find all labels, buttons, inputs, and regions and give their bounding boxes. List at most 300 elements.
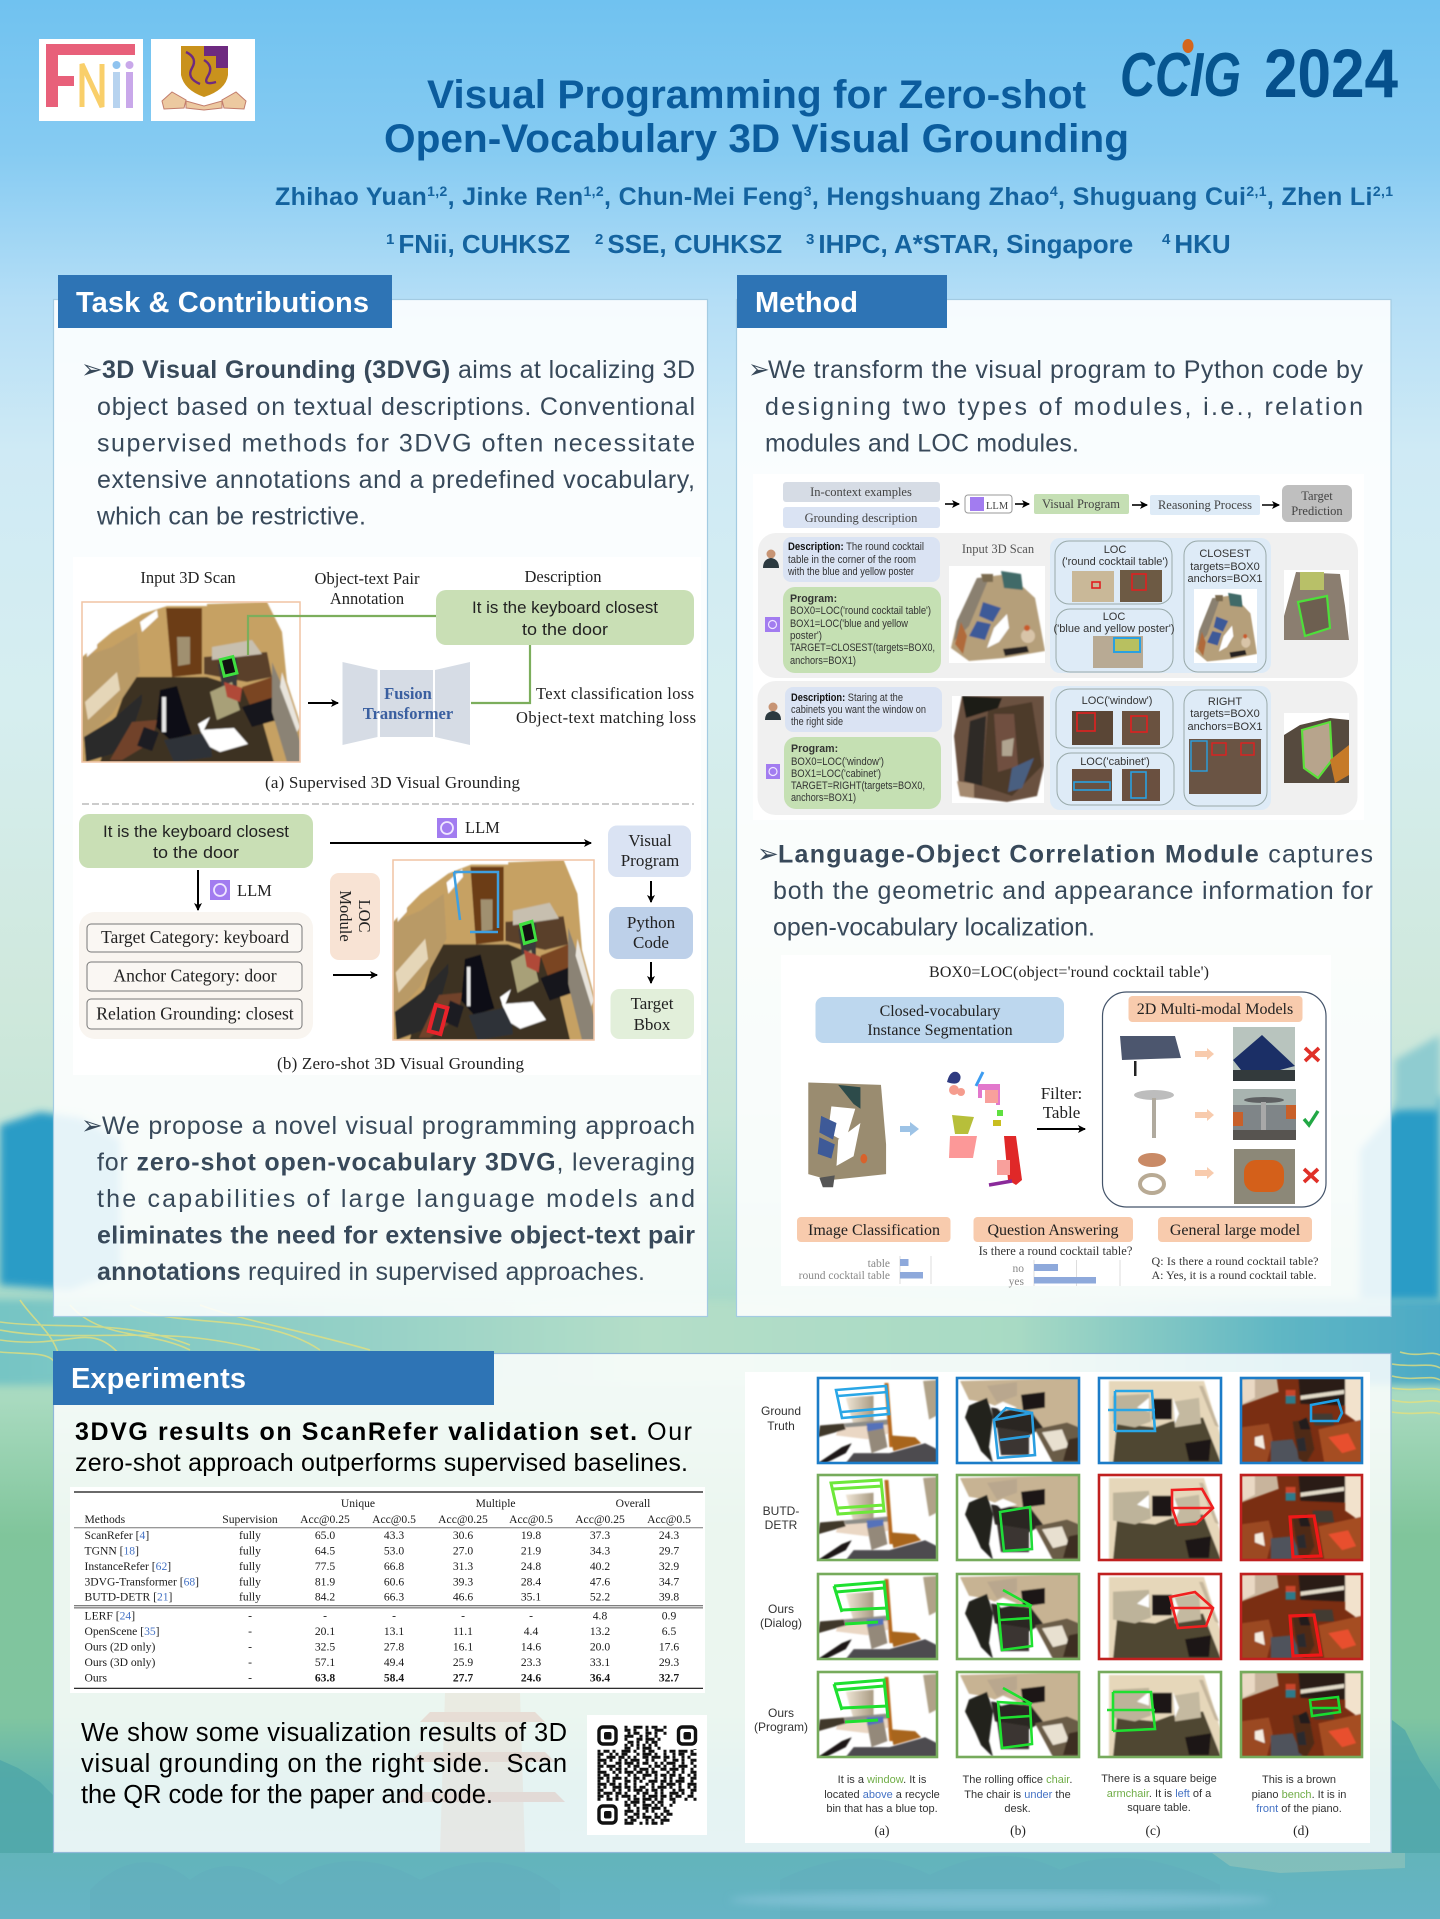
- text block: proposed approach: for zero-shot open-vocabulary 3DVG, leveraging: [97, 1148, 695, 1176]
- example row 1: table in the corner of the room: [788, 554, 916, 566]
- example row 1: [758, 533, 1358, 678]
- question answering: [974, 1217, 1133, 1288]
- figure: LOC module: [781, 955, 1331, 1288]
- pipeline legend: Reasoning Process: [1158, 498, 1252, 512]
- text block: task description: extensive annotations and a predefined vocabulary,: [97, 466, 695, 494]
- results table: 19.8: [521, 1529, 541, 1542]
- decoration: pagoda: [400, 1693, 565, 1852]
- results table: 4.8: [593, 1610, 607, 1623]
- results table: Supervision: [222, 1513, 278, 1526]
- text block: task description: object based on textual descriptions. Conventional: [97, 393, 695, 421]
- results table: -: [248, 1625, 252, 1638]
- results table: TGNN [18]: [84, 1544, 139, 1557]
- caption d: piano bench. It is in: [1252, 1789, 1346, 1801]
- example row 1: anchors=BOX1: [1188, 573, 1262, 585]
- image classification: table: [868, 1258, 890, 1270]
- results table: 52.2: [590, 1591, 610, 1604]
- results table: 60.6: [384, 1575, 404, 1588]
- example row 2: LOC('window'): [1082, 695, 1152, 707]
- row labels: BUTD-: [763, 1504, 799, 1518]
- results table: ScanRefer [4]: [84, 1529, 149, 1542]
- results table: Methods: [84, 1513, 126, 1526]
- example row 1: TARGET=CLOSEST(targets=BOX0,: [790, 642, 935, 654]
- results table: 63.8: [315, 1671, 335, 1684]
- text block: method intro: modules and LOC modules.: [765, 430, 1079, 458]
- categories box: Anchor Category: door: [113, 966, 277, 986]
- results table: Acc@0.25: [438, 1513, 488, 1526]
- panel: task and contributions: [54, 275, 708, 1316]
- figure: LOC module: Table: [1043, 1103, 1080, 1122]
- text block: task description: which can be restrictive.: [96, 502, 366, 530]
- results table: 24.3: [659, 1529, 679, 1542]
- authors: , Jinke Ren: [448, 183, 583, 211]
- QR code: [587, 1715, 707, 1835]
- figure: qualitative results: [745, 1372, 1370, 1843]
- figure part a: supervised: Input 3D Scan: [140, 568, 236, 587]
- results table: 66.3: [384, 1591, 404, 1604]
- example row 1: BOX1=LOC('blue and yellow: [790, 618, 908, 630]
- categories box: Target Category: keyboard: [101, 927, 289, 947]
- results table: 43.3: [384, 1529, 404, 1542]
- caption c: There is a square beige: [1101, 1773, 1217, 1785]
- results table: fully: [239, 1544, 261, 1557]
- text block: task description: ➢: [81, 355, 103, 385]
- 2D multi-modal models box: 2D Multi-modal Models: [1137, 1001, 1293, 1018]
- text block: language-object correlation module: [757, 840, 1373, 942]
- results table: Multiple: [476, 1497, 516, 1510]
- row: ours (dialog): [818, 1574, 1362, 1659]
- icon: LLM: [437, 818, 457, 838]
- question answering: Is there a round cocktail table?: [979, 1244, 1133, 1258]
- header: experiments: Experiments: [71, 1363, 246, 1395]
- example row 1: Description: The round cocktail: [788, 541, 924, 553]
- caption c: square table.: [1127, 1802, 1191, 1814]
- scan with predicted boxes: [393, 860, 594, 1040]
- results table: 31.3: [453, 1560, 473, 1573]
- results table: Acc@0.5: [509, 1513, 553, 1526]
- results table: 27.0: [453, 1544, 473, 1557]
- results table: OpenScene [35]: [84, 1625, 160, 1638]
- pipeline legend: [783, 482, 1352, 528]
- room scan: [808, 1083, 886, 1187]
- results table: 17.6: [659, 1641, 679, 1654]
- pipeline legend: Prediction: [1291, 504, 1343, 518]
- text block: language-object correlation module: open-vocabulary localization.: [773, 914, 1095, 942]
- text block: visualization note: [81, 1719, 567, 1809]
- results table: 16.1: [453, 1641, 473, 1654]
- figure part a: supervised: Annotation: [330, 589, 404, 608]
- results table: 81.9: [315, 1575, 335, 1588]
- row: ground truth: [818, 1378, 1362, 1463]
- caption c: [1101, 1773, 1217, 1838]
- results table: fully: [239, 1575, 261, 1588]
- row labels: (Program): [754, 1720, 808, 1734]
- text block: task description: 3D Visual Grounding (3DVG) aims at localizing 3D: [102, 356, 695, 384]
- authors: 1,2: [427, 183, 447, 199]
- caption b: The rolling office chair.: [963, 1774, 1072, 1786]
- authors: , Shuguang Cui: [1058, 183, 1246, 211]
- results table: 53.0: [384, 1544, 404, 1557]
- example row 1: ('round cocktail table'): [1062, 556, 1168, 568]
- caption a: [824, 1774, 940, 1838]
- results table: LERF [24]: [84, 1610, 135, 1623]
- results table: Ours: [84, 1671, 108, 1684]
- icon: person: [763, 550, 779, 568]
- row labels: Truth: [767, 1419, 795, 1433]
- text block: language-object correlation module: ➢: [757, 840, 779, 870]
- scan image: [82, 602, 300, 762]
- general large model: A: Yes, it is a round cocktail table.: [1152, 1268, 1316, 1282]
- authors: , Chun-Mei Feng: [604, 183, 803, 211]
- results table: -: [529, 1610, 533, 1623]
- affiliations: IHPC, A*STAR, Singapore: [818, 229, 1133, 259]
- text block: visualization note: visual grounding on the right side. Scan: [81, 1750, 567, 1778]
- image classification: [797, 1217, 950, 1284]
- row labels: Ground: [761, 1404, 801, 1418]
- figure: LOC module: Filter:: [1041, 1084, 1082, 1103]
- figure part b: zero-shot: LOC: [355, 900, 374, 932]
- closed-vocabulary box: [816, 997, 1064, 1043]
- closed-vocabulary box: Closed-vocabulary: [880, 1003, 1000, 1020]
- row: BUTD-DETR: [818, 1475, 1362, 1560]
- figure: visual program pipeline: [753, 474, 1364, 820]
- header: experiments: [53, 1351, 494, 1405]
- results table: fully: [239, 1560, 261, 1573]
- icon: person: [765, 702, 781, 720]
- header: method: [737, 275, 947, 328]
- panel: experiments: [53, 1351, 1391, 1852]
- results table: -: [461, 1610, 465, 1623]
- caption a: It is a window. It is: [838, 1774, 927, 1786]
- results table: 40.2: [590, 1560, 610, 1573]
- results table: 24.8: [521, 1560, 541, 1573]
- general large model: General large model: [1170, 1222, 1301, 1239]
- figure part a: supervised: (a) Supervised 3D Visual Grounding: [265, 773, 520, 792]
- results table: -: [248, 1671, 252, 1684]
- affiliations: HKU: [1174, 229, 1231, 259]
- row: ours (program): [818, 1672, 1362, 1757]
- row labels: DETR: [765, 1518, 798, 1532]
- categories box: [79, 912, 313, 1039]
- results table: 11.1: [453, 1625, 473, 1638]
- results table: Acc@0.5: [647, 1513, 691, 1526]
- example row 2: Description: Staring at the: [791, 692, 903, 704]
- text block: proposed approach: ➢: [81, 1111, 103, 1141]
- results table: 84.2: [315, 1591, 335, 1604]
- caption c: (c): [1146, 1823, 1160, 1838]
- general large model: Q: Is there a round cocktail table?: [1152, 1254, 1318, 1268]
- figure part b: zero-shot: Code: [633, 933, 669, 952]
- header: task and contributions: Task & Contributions: [76, 287, 369, 319]
- results table: fully: [239, 1529, 261, 1542]
- affiliations: 4: [1162, 231, 1171, 248]
- logo: CUHK crest: [151, 39, 255, 121]
- results table: 77.5: [315, 1560, 335, 1573]
- text block: method intro: ➢: [748, 355, 770, 385]
- results table: Ours (2D only): [84, 1641, 155, 1654]
- results table: Overall: [616, 1497, 650, 1510]
- closed-vocabulary box: Instance Segmentation: [867, 1022, 1013, 1039]
- title: Visual Programming for Zero-shot: [427, 73, 1086, 117]
- conference logo: CCIG 2024: CCIG: [1120, 41, 1241, 110]
- results table: fully: [239, 1591, 261, 1604]
- results table: Acc@0.25: [300, 1513, 350, 1526]
- example row 2: [758, 681, 1358, 815]
- caption a: (a): [875, 1823, 889, 1838]
- row labels: Ours: [768, 1602, 794, 1616]
- results table: 39.8: [659, 1591, 679, 1604]
- results table: Unique: [341, 1497, 375, 1510]
- example row 2: RIGHT: [1208, 696, 1242, 708]
- affiliations: 1: [386, 231, 394, 248]
- affiliations: 3: [806, 231, 814, 248]
- text block: proposed approach: the capabilities of large language models and: [97, 1185, 695, 1213]
- row labels: Ours: [768, 1706, 794, 1720]
- figure part b: zero-shot: [79, 814, 694, 1073]
- results table: Acc@0.25: [575, 1513, 625, 1526]
- authors: Zhihao Yuan: [275, 183, 427, 211]
- question answering: yes: [1009, 1276, 1025, 1288]
- general large model: [1152, 1217, 1318, 1282]
- results table: 27.8: [384, 1641, 404, 1654]
- caption b: The chair is under the: [964, 1789, 1071, 1801]
- fusion transformer: Fusion: [384, 684, 432, 703]
- pipeline legend: LLM: [986, 501, 1009, 512]
- example row 2: BOX0=LOC('window'): [791, 756, 884, 768]
- segmentation: [947, 1072, 1022, 1185]
- example row 1: CLOSEST: [1199, 548, 1251, 560]
- example row 1: LOC: [1103, 611, 1125, 623]
- authors: , Hengshuang Zhao: [812, 183, 1050, 211]
- results table: 13.2: [590, 1625, 610, 1638]
- panel: method: [736, 275, 1391, 1316]
- example row 2: cabinets you want the window on: [791, 704, 926, 716]
- title: Open-Vocabulary 3D Visual Grounding: [384, 117, 1129, 161]
- text block: results summary: [75, 1418, 692, 1477]
- results table: Acc@0.5: [372, 1513, 416, 1526]
- caption d: [1252, 1774, 1346, 1838]
- authors: , Zhen Li: [1267, 183, 1372, 211]
- title: [384, 73, 1129, 161]
- authors: 3: [804, 183, 812, 199]
- figure part b: zero-shot: LLM: [465, 818, 500, 837]
- results table: 21.9: [521, 1544, 541, 1557]
- results table: 33.1: [590, 1656, 610, 1669]
- image classification: round cocktail table: [799, 1270, 890, 1282]
- text block: results summary: 3DVG results on ScanRefer validation set. Our: [75, 1418, 692, 1446]
- results table: [70, 1487, 705, 1693]
- icon: LLM: [765, 617, 780, 632]
- results table: 24.6: [521, 1671, 541, 1684]
- caption d: (d): [1293, 1823, 1309, 1838]
- results table: BUTD-DETR [21]: [84, 1591, 172, 1604]
- results table: 32.7: [659, 1671, 679, 1684]
- figure part b: zero-shot: (b) Zero-shot 3D Visual Grounding: [277, 1054, 524, 1073]
- text block: task description: [81, 355, 695, 530]
- description box: It is the keyboard closest: [472, 598, 658, 617]
- example row 2: targets=BOX0: [1190, 708, 1260, 720]
- results table: 47.6: [590, 1575, 610, 1588]
- example row 1: targets=BOX0: [1190, 561, 1260, 573]
- categories box: Relation Grounding: closest: [96, 1004, 294, 1024]
- figure part b: zero-shot: Python: [627, 913, 676, 932]
- results table: 13.1: [384, 1625, 404, 1638]
- results table: 32.9: [659, 1560, 679, 1573]
- results table: 3DVG-Transformer [68]: [84, 1575, 199, 1588]
- affiliations: 2: [595, 231, 603, 248]
- results table: 32.5: [315, 1641, 335, 1654]
- figure part b: zero-shot: Program: [621, 851, 679, 870]
- text block: visualization note: the QR code for the paper and code.: [81, 1781, 493, 1809]
- caption a: located above a recycle: [824, 1789, 940, 1801]
- figure part b: zero-shot: to the door: [153, 843, 239, 862]
- icon: LLM: [766, 764, 780, 779]
- results table: 14.6: [521, 1641, 541, 1654]
- results table: 30.6: [453, 1529, 473, 1542]
- results table: 34.3: [590, 1544, 610, 1557]
- figure part a: supervised: [82, 567, 696, 792]
- results table: 27.7: [453, 1671, 473, 1684]
- results table: -: [323, 1610, 327, 1623]
- results table: 34.7: [659, 1575, 679, 1588]
- example row 1: Input 3D Scan: [962, 542, 1035, 556]
- header: task and contributions: [58, 275, 392, 328]
- question answering: no: [1012, 1263, 1024, 1275]
- question answering: Question Answering: [987, 1222, 1119, 1239]
- results table: -: [392, 1610, 396, 1623]
- example row 2: BOX1=LOC('cabinet'): [791, 768, 881, 780]
- example row 2: TARGET=RIGHT(targets=BOX0,: [791, 780, 925, 792]
- results table: -: [248, 1656, 252, 1669]
- example row 2: anchors=BOX1: [1188, 721, 1262, 733]
- text block: proposed approach: [81, 1111, 695, 1286]
- row labels: [754, 1404, 808, 1734]
- example row 2: Program:: [791, 743, 838, 755]
- figure part a: supervised: Text classification loss: [536, 684, 694, 703]
- fusion transformer: Transformer: [363, 704, 453, 723]
- caption d: front of the piano.: [1256, 1803, 1342, 1815]
- fusion transformer: [342, 662, 470, 745]
- example row 1: BOX0=LOC('round cocktail table'): [790, 605, 931, 617]
- results table: 65.0: [315, 1529, 335, 1542]
- results table: -: [248, 1641, 252, 1654]
- image classification: Image Classification: [808, 1222, 940, 1239]
- example row 1: with the blue and yellow poster: [787, 566, 914, 578]
- text block: task description: supervised methods for 3DVG often necessitate: [97, 430, 695, 458]
- figure part b: zero-shot: Module: [336, 890, 355, 942]
- example row 1: anchors=BOX1): [790, 655, 856, 667]
- figure part b: zero-shot: Visual: [628, 831, 672, 850]
- authors: 2,1: [1373, 183, 1393, 199]
- caption a: bin that has a blue top.: [826, 1803, 938, 1815]
- example row 1: LOC: [1104, 544, 1126, 556]
- results table: 29.3: [659, 1656, 679, 1669]
- authors: 1,2: [583, 183, 604, 199]
- results table: 66.8: [384, 1560, 404, 1573]
- text block: language-object correlation module: Language-Object Correlation Module captures: [778, 840, 1373, 868]
- figure part b: zero-shot: Target: [631, 994, 674, 1013]
- pipeline legend: In-context examples: [810, 485, 912, 499]
- results table: 4.4: [524, 1625, 538, 1638]
- results table: 37.3: [590, 1529, 610, 1542]
- text block: visualization note: We show some visualization results of 3D: [81, 1719, 567, 1747]
- caption c: armchair. It is left of a: [1107, 1788, 1212, 1800]
- figure: supervised and zero-shot 3D visual grounding: [73, 557, 701, 1075]
- figure part b: zero-shot: LLM: [237, 881, 272, 900]
- caption b: desk.: [1004, 1803, 1031, 1815]
- conference logo: CCIG 2024: [1120, 35, 1398, 112]
- text block: proposed approach: We propose a novel visual programming approach: [102, 1112, 695, 1140]
- affiliations: [386, 229, 1231, 259]
- results table: 35.1: [521, 1591, 541, 1604]
- header: method: Method: [755, 287, 858, 319]
- text block: method intro: designing two types of modules, i.e., relation: [765, 393, 1363, 421]
- logo: FNii: [39, 39, 143, 121]
- 2D multi-modal models box: [1102, 992, 1326, 1207]
- text block: method intro: [748, 355, 1364, 458]
- authors: 2,1: [1246, 183, 1267, 199]
- results table: 58.4: [384, 1671, 404, 1684]
- pipeline legend: Visual Program: [1042, 497, 1120, 511]
- caption d: This is a brown: [1262, 1774, 1336, 1786]
- icon: LLM: [210, 880, 230, 900]
- results table: 39.3: [453, 1575, 473, 1588]
- affiliations: SSE, CUHKSZ: [607, 229, 782, 259]
- pipeline legend: Grounding description: [805, 511, 918, 525]
- caption b: [963, 1774, 1072, 1838]
- example row 1: Program:: [790, 593, 837, 605]
- authors: 4: [1050, 183, 1058, 199]
- text block: proposed approach: annotations required in supervised approaches.: [97, 1258, 645, 1286]
- results table: 36.4: [590, 1671, 610, 1684]
- results table: Ours (3D only): [84, 1656, 155, 1669]
- text block: language-object correlation module: both the geometric and appearance information for: [773, 877, 1373, 905]
- description box: to the door: [522, 620, 608, 639]
- example row 2: anchors=BOX1): [791, 792, 856, 804]
- text block: results summary: zero-shot approach outperforms supervised baselines.: [75, 1449, 688, 1477]
- results table: 28.4: [521, 1575, 541, 1588]
- results table: -: [248, 1610, 252, 1623]
- results table: 6.5: [662, 1625, 676, 1638]
- text block: proposed approach: eliminates the need for extensive object-text pair: [97, 1222, 695, 1250]
- example row 2: LOC('cabinet'): [1080, 756, 1150, 768]
- figure part a: supervised: Object-text Pair: [315, 569, 420, 588]
- results table: 29.7: [659, 1544, 679, 1557]
- figure part a: supervised: Description: [525, 567, 601, 586]
- text block: method intro: We transform the visual program to Python code by: [768, 356, 1364, 384]
- results table: 20.0: [590, 1641, 610, 1654]
- results table: 25.9: [453, 1656, 473, 1669]
- caption b: (b): [1010, 1823, 1026, 1838]
- description box: [436, 590, 694, 645]
- affiliations: FNii, CUHKSZ: [398, 229, 570, 259]
- results table: 23.3: [521, 1656, 541, 1669]
- conference logo: CCIG 2024: 2024: [1264, 35, 1398, 112]
- figure: LOC module: BOX0=LOC(object='round cocktail table'): [929, 964, 1209, 981]
- results table: 64.5: [315, 1544, 335, 1557]
- authors: [275, 183, 1393, 211]
- results table: InstanceRefer [62]: [84, 1560, 171, 1573]
- example row 1: poster'): [790, 630, 822, 642]
- results table: 49.4: [384, 1656, 404, 1669]
- results table: 0.9: [662, 1610, 676, 1623]
- row labels: (Dialog): [760, 1616, 802, 1630]
- example row 2: the right side: [791, 716, 843, 728]
- example row 1: ('blue and yellow poster'): [1054, 623, 1174, 635]
- results table: 46.6: [453, 1591, 473, 1604]
- results table: 20.1: [315, 1625, 335, 1638]
- results table: 57.1: [315, 1656, 335, 1669]
